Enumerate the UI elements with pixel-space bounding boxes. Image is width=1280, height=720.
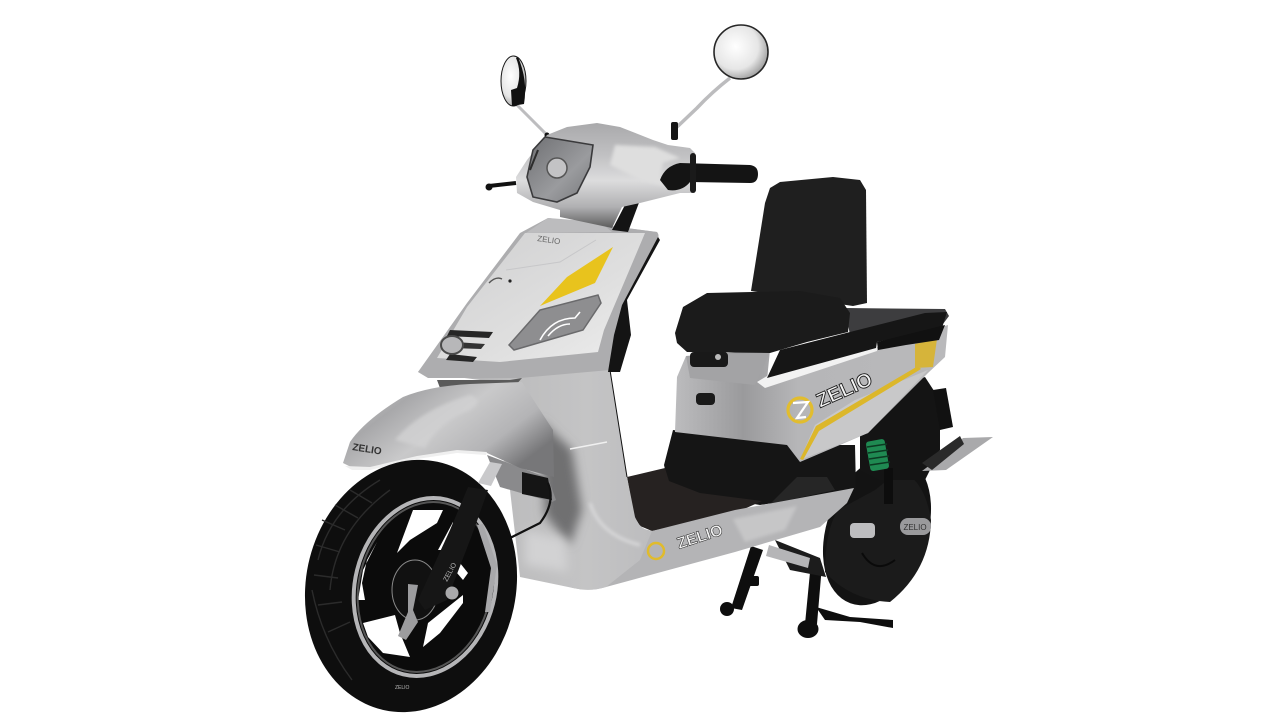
shield edge line xyxy=(610,370,627,477)
seat base latch xyxy=(690,352,728,367)
grab rail xyxy=(877,325,945,350)
yellow stripe xyxy=(800,366,921,460)
rear suspension and number plate xyxy=(860,377,953,504)
brake cable xyxy=(500,483,551,543)
hub xyxy=(392,560,438,620)
right mirror xyxy=(671,25,768,140)
brand wordmark: ZELIO xyxy=(813,369,876,413)
rim ring xyxy=(335,483,515,691)
rim fill xyxy=(334,482,516,692)
brake caliper xyxy=(398,584,418,640)
lower body logo xyxy=(648,522,725,559)
tyre label: ZELIO xyxy=(395,685,410,691)
left brake lever xyxy=(486,183,516,190)
front fork xyxy=(418,462,502,610)
black seat side panel xyxy=(767,312,947,378)
front vents and badge xyxy=(441,330,493,362)
front shield lower body xyxy=(418,218,658,590)
lower body logo: ZELIO xyxy=(675,522,725,553)
rear wheel and motor cover xyxy=(803,440,951,620)
rear footplate xyxy=(922,436,993,471)
tyre tread xyxy=(312,480,390,680)
wheel openings xyxy=(358,510,468,657)
backrest xyxy=(751,177,867,306)
front wheel xyxy=(282,440,540,720)
turn signal lamp xyxy=(509,295,601,350)
floor mat xyxy=(627,468,762,531)
headlamp lens xyxy=(527,137,593,202)
yellow badge xyxy=(915,339,937,368)
shield side bands xyxy=(418,218,658,378)
seat xyxy=(675,291,850,353)
handlebar neck xyxy=(612,200,640,232)
brand logo emblem xyxy=(788,398,812,422)
rear rack xyxy=(845,308,949,335)
cowl highlight xyxy=(610,145,680,188)
left mirror xyxy=(501,56,550,138)
motor badge plate xyxy=(850,518,931,538)
white trim stripe xyxy=(757,345,877,388)
front fender xyxy=(343,382,554,477)
rear body panel xyxy=(675,325,948,462)
shield logo text: ZELIO xyxy=(537,234,561,246)
yellow accent xyxy=(540,247,613,306)
shield dark gap under fender xyxy=(437,378,556,502)
motor badge plate: ZELIO xyxy=(903,523,927,532)
front fork: ZELIO xyxy=(443,561,459,583)
lower body side panel xyxy=(540,488,854,590)
right handlebar grip xyxy=(660,153,758,193)
headlamp cowl xyxy=(516,123,695,228)
scooter lock xyxy=(696,393,715,405)
tyre xyxy=(282,440,540,720)
fender logo text: ZELIO xyxy=(352,442,383,458)
underfloor black tunnel xyxy=(664,430,856,505)
black inner shield shadow xyxy=(608,237,660,372)
stands and exhaust xyxy=(720,540,893,638)
